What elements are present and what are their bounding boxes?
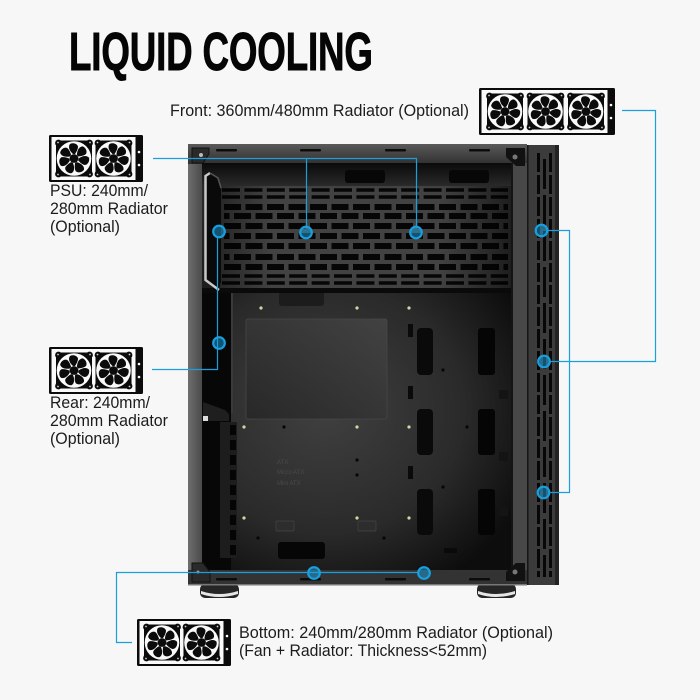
tray markings and PSU vent [276,460,376,559]
icon: bottom radiator [137,619,231,666]
label: rear radiator: (Optional) [50,430,120,448]
case feet [200,584,516,598]
title: LIQUID COOLING [69,21,373,82]
upper compartment with fan mesh [202,163,511,293]
case shell [188,144,527,586]
motherboard tray [202,293,511,570]
label: rear radiator: 280mm Radiator [50,412,168,430]
cable routing holes [408,324,508,553]
icon: front radiator [479,88,615,135]
PC case illustration [188,144,559,598]
label: PSU radiator: 280mm Radiator [50,200,168,218]
corner brackets [192,148,525,582]
standoff screws [242,306,411,520]
tray markings and PSU vent: Micro ATX [277,470,304,476]
label: front radiator: Front: 360mm/480mm Radiator (Optional) [170,102,469,120]
connector lines [116,110,656,642]
expansion slots [220,422,237,558]
label: PSU radiator: PSU: 240mm/ [50,182,148,200]
callout markers [213,225,550,579]
label: bottom radiator: Bottom: 240mm/280mm Radiator (Optional) [239,624,553,642]
label: PSU radiator: (Optional) [50,218,120,236]
rear bracket [206,172,221,290]
front panel with vents [527,145,559,585]
top and bottom panel slits [216,149,490,580]
CPU cutout [246,319,387,419]
label: bottom radiator: (Fan + Radiator: Thickness<52mm) [239,642,487,660]
icon: PSU radiator [49,135,143,182]
label: rear radiator: Rear: 240mm/ [50,394,150,412]
icon: rear radiator [49,347,143,394]
mounting holes [256,368,469,540]
tray markings and PSU vent: ATX [277,460,288,466]
tray markings and PSU vent: Mini ATX [277,481,301,487]
